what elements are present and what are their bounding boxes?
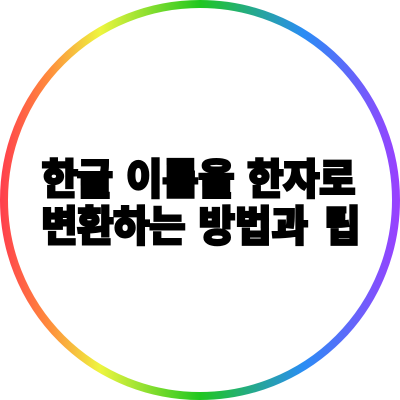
title line 1: 한글 이름을 한자로 (42, 156, 356, 203)
title (41, 156, 361, 250)
title line 2: 변환하는 방법과 팁 (41, 203, 361, 250)
